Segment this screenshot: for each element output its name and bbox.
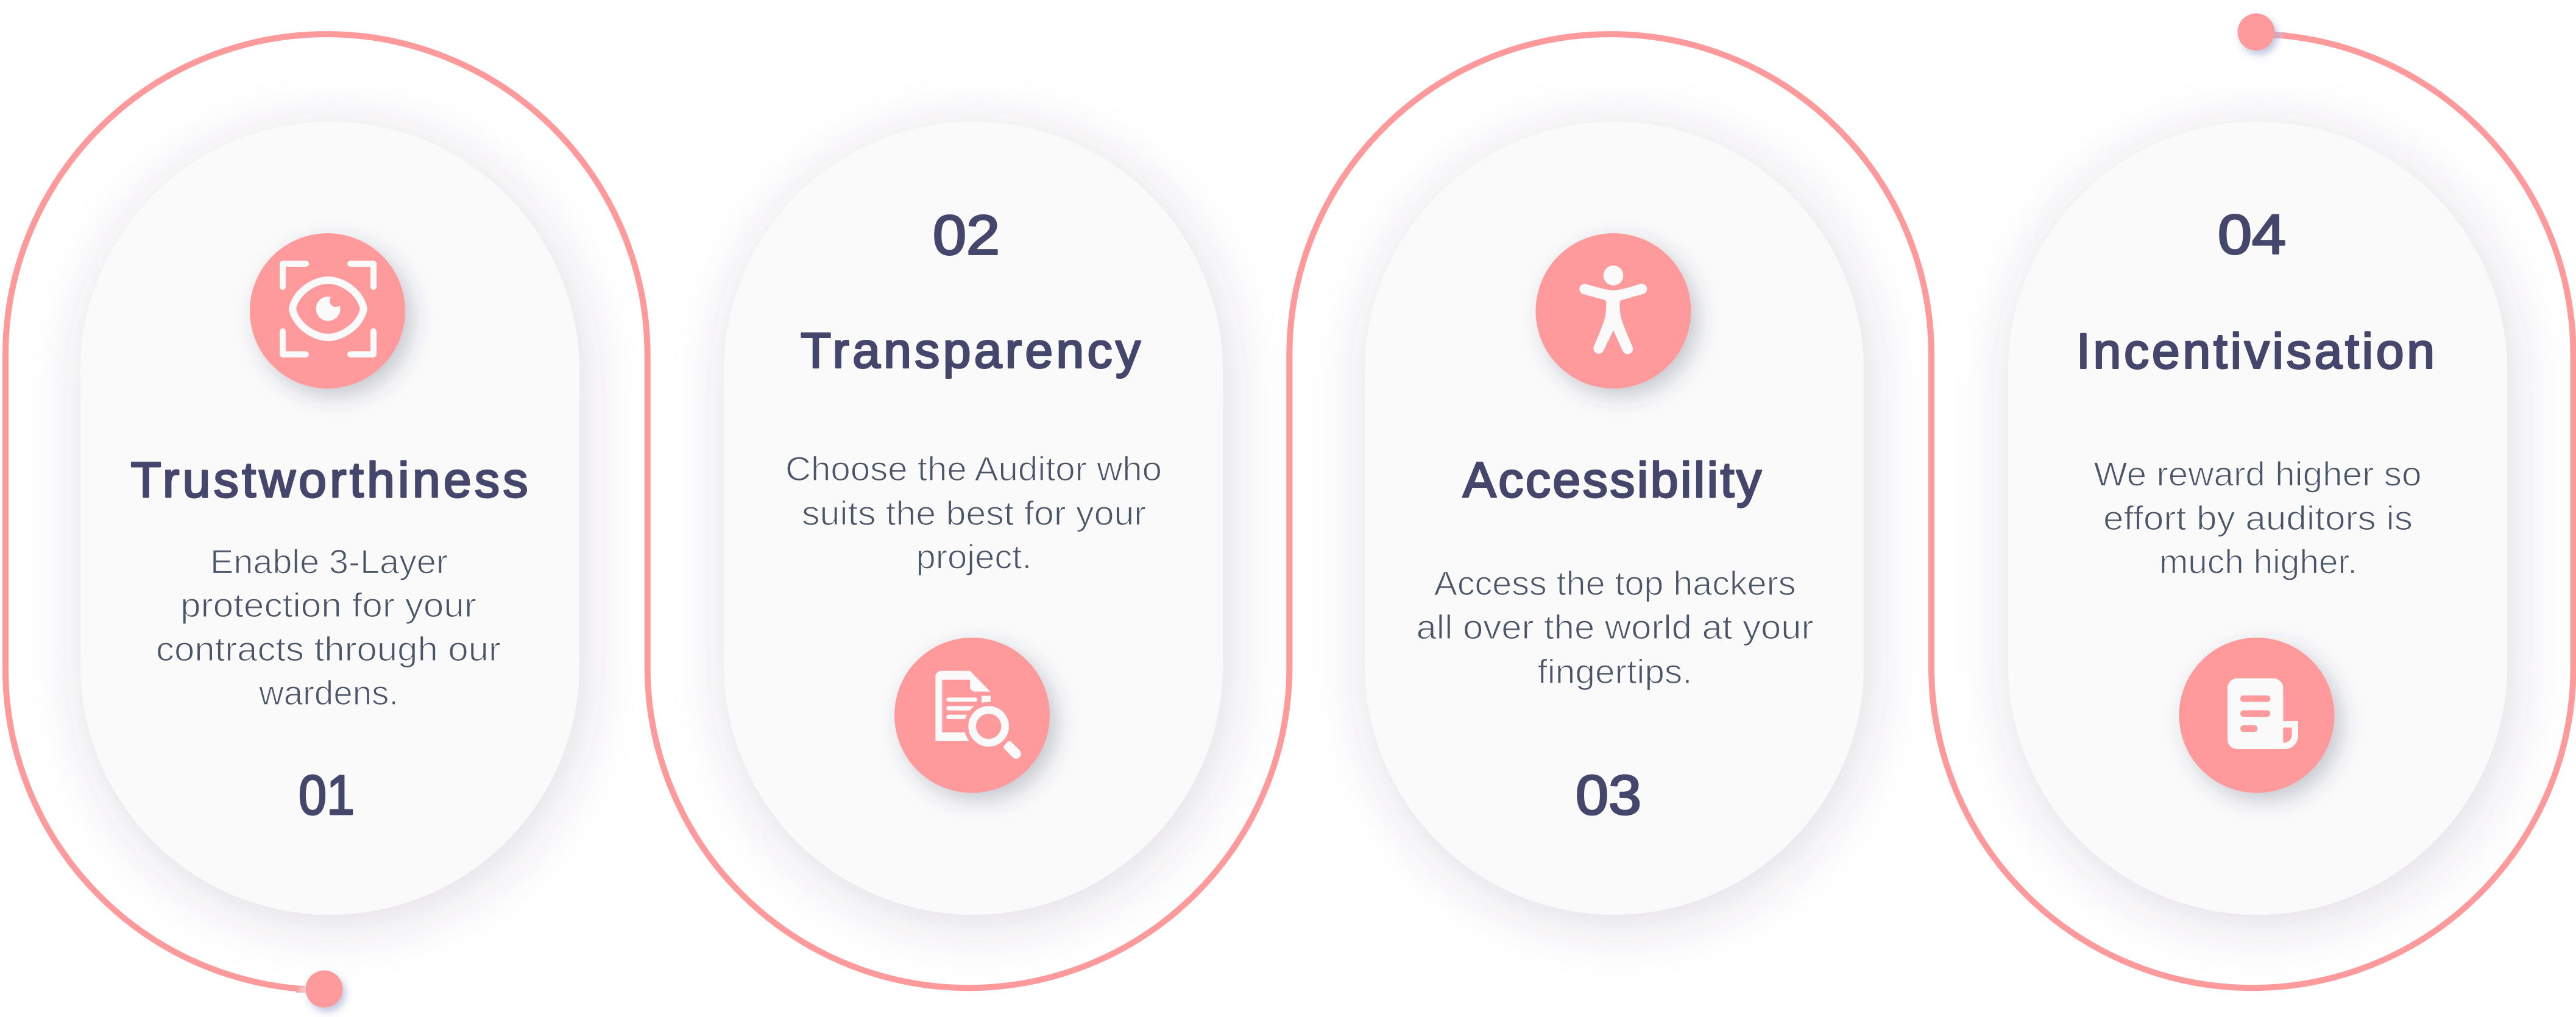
text block: card 4 description: much higher.: [2159, 543, 2357, 581]
text block: card 3 description: Access the top hackers: [1434, 564, 1796, 602]
text block: card 1 description: wardens.: [258, 674, 398, 712]
panel: card 1 Trustworthiness: [80, 122, 579, 915]
heading: Transparency: Transparency: [801, 323, 1141, 379]
heading: Trustworthiness: Trustworthiness: [130, 452, 528, 508]
icon: document with magnifier: [894, 638, 1050, 793]
heading: Incentivisation: Incentivisation: [2076, 324, 2435, 379]
icon: eye scan: [250, 233, 405, 389]
heading: Accessibility: Accessibility: [1463, 452, 1761, 508]
panel: card 4 Incentivisation: [2008, 122, 2507, 915]
text block: card 3 description: [1416, 564, 1813, 691]
text block: card 1 description: Enable 3-Layer: [210, 542, 448, 581]
number: 04: 04: [2218, 203, 2286, 266]
dot: line end near card 4: [2237, 13, 2285, 51]
text block: card 3 description: all over the world at your: [1416, 608, 1813, 646]
text block: card 2 description: suits the best for your: [802, 494, 1146, 532]
icon: accessibility person: [1535, 233, 1691, 389]
dot: line start near card 1: [296, 971, 342, 1007]
panel: card 3 Accessibility: [1365, 122, 1864, 915]
text block: card 3 description: fingertips.: [1538, 652, 1693, 691]
text block: card 1 description: protection for your: [180, 586, 476, 624]
number: 02: 02: [933, 205, 1000, 267]
text block: card 4 description: [2093, 455, 2421, 581]
text block: card 4 description: We reward higher so: [2093, 455, 2421, 493]
text block: card 2 description: Choose the Auditor who: [785, 449, 1162, 488]
icon: paper scroll: [2179, 638, 2335, 793]
text block: card 1 description: contracts through our: [156, 630, 501, 668]
text block: card 2 description: project.: [916, 537, 1032, 576]
panel: card 2 Transparency: [724, 122, 1223, 915]
text block: card 2 description: [785, 449, 1162, 576]
text block: card 4 description: effort by auditors is: [2103, 499, 2413, 537]
number: 01: 01: [299, 764, 355, 826]
text block: card 1 description: [156, 542, 501, 712]
number: 03: 03: [1576, 764, 1641, 826]
